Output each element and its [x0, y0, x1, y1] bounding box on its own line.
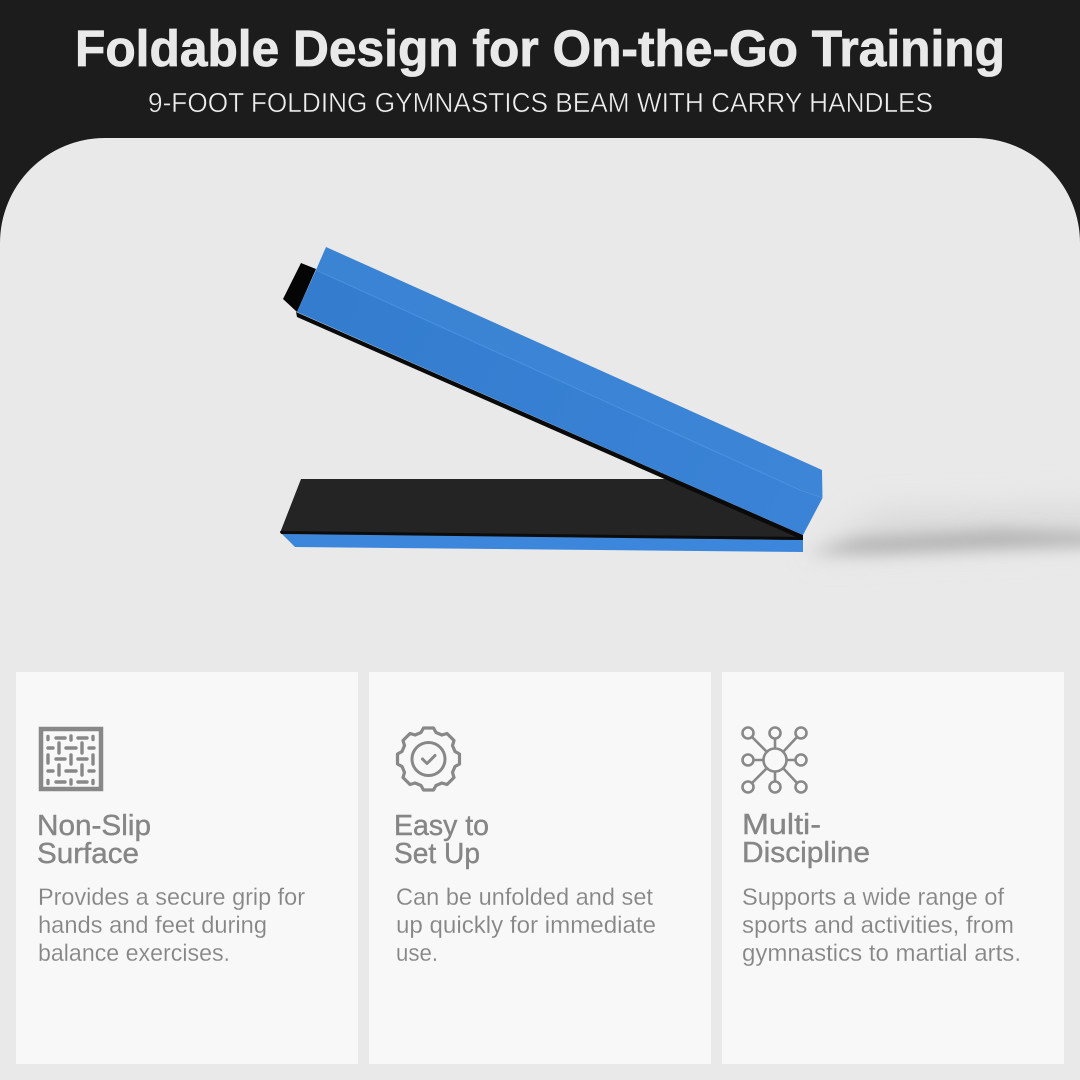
description: balance exercises.	[38, 940, 230, 967]
description	[38, 884, 305, 967]
underside edge	[296, 312, 803, 540]
description	[742, 884, 1021, 967]
panel: multi-discipline	[722, 672, 1064, 1064]
heading: Non-Slip	[37, 810, 151, 842]
title: Foldable Design for On-the-Go Training	[75, 20, 1005, 77]
description	[396, 884, 656, 967]
heading: Surface	[37, 838, 139, 870]
heading: Easy to	[394, 810, 489, 842]
upper beam section	[283, 247, 822, 540]
icon: textured grid	[41, 729, 101, 789]
heading	[37, 810, 151, 870]
description: hands and feet during	[38, 912, 267, 939]
icon: gear with check	[398, 728, 460, 790]
heading	[742, 809, 870, 869]
product: folded balance beam	[280, 247, 822, 552]
description: up quickly for immediate	[396, 912, 656, 939]
heading	[394, 810, 489, 870]
panel: easy to set up	[369, 672, 711, 1064]
description: Supports a wide range of	[742, 884, 1004, 911]
header background	[0, 0, 1080, 300]
description: Provides a secure grip for	[38, 884, 305, 911]
floor shadow	[806, 505, 1080, 553]
description: Can be unfolded and set	[396, 884, 653, 911]
carry handle	[283, 263, 316, 312]
panel: non-slip surface	[16, 672, 358, 1064]
lower beam section	[280, 479, 803, 552]
description: gymnastics to martial arts.	[742, 940, 1021, 967]
heading: Multi-	[742, 809, 821, 841]
description: use.	[396, 940, 438, 967]
subtitle: 9-FOOT FOLDING GYMNASTICS BEAM WITH CARRY HANDLES	[148, 87, 933, 118]
description: sports and activities, from	[742, 912, 1014, 939]
icon: connected network	[742, 728, 806, 792]
heading: Discipline	[742, 837, 870, 869]
heading: Set Up	[394, 838, 480, 870]
